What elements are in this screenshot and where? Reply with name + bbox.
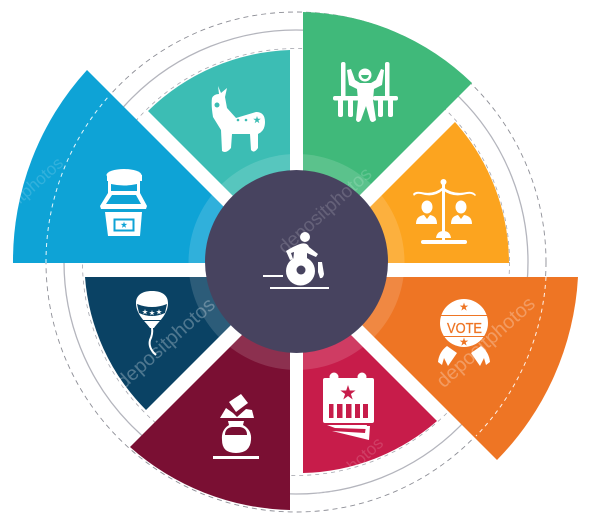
wedge: crimson small <box>303 287 437 473</box>
icon: voting kiosk <box>100 169 147 236</box>
wedge: blue large <box>13 70 280 263</box>
watermark text <box>0 153 540 518</box>
icon: vote badge <box>438 299 490 366</box>
icon: wheelchair user <box>263 232 329 289</box>
gray outer rings <box>46 12 546 512</box>
translucent inner ring <box>188 154 404 370</box>
watermark text: depositphotos <box>274 164 376 258</box>
centre circle <box>205 170 388 353</box>
icon: balloon <box>136 291 168 355</box>
icon: scales with two people <box>413 179 476 244</box>
watermark text: depositphotos <box>112 294 220 393</box>
icon: election calendar <box>323 372 374 440</box>
watermark text: depositphotos <box>296 433 387 518</box>
wedge: navy small <box>85 277 279 410</box>
icon: vote badge: VOTE <box>447 320 482 337</box>
icon: ballot and jar <box>213 394 259 459</box>
wedge: green large <box>303 12 472 252</box>
watermark text: depositphotos <box>432 293 540 392</box>
white dashed ring segments over large wedges <box>46 96 546 436</box>
wedge: orange large <box>314 277 578 460</box>
wedge: amber small <box>314 122 509 263</box>
icon: person on stage <box>333 62 398 122</box>
wedge: teal small <box>148 50 290 253</box>
icon: donkey <box>212 86 265 152</box>
wedge: maroon large <box>130 287 290 510</box>
